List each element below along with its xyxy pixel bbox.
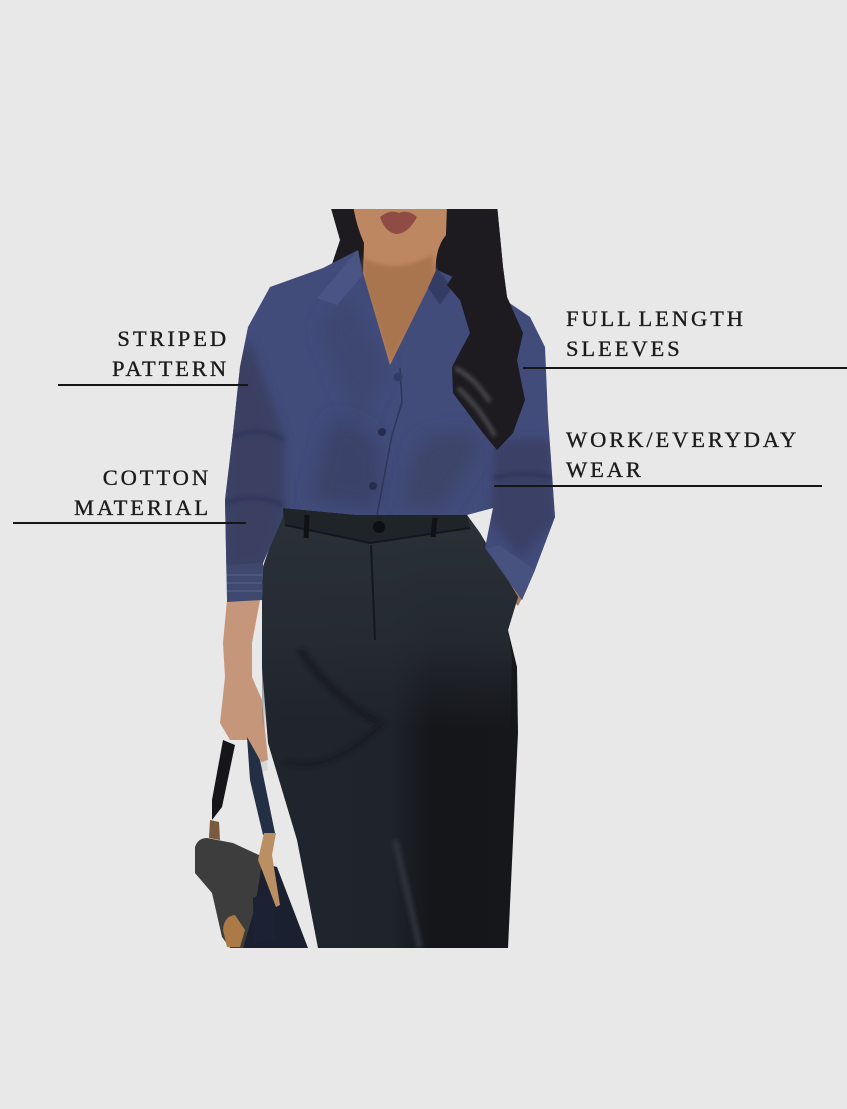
label: striped pattern: PATTERN <box>112 356 229 381</box>
left forearm and hand <box>220 600 268 772</box>
hair <box>331 209 510 304</box>
cuffs <box>227 563 263 602</box>
label: cotton material <box>74 465 211 520</box>
model photo illustration <box>195 209 555 948</box>
leader line: work/everyday wear <box>494 485 822 487</box>
label: full length sleeves <box>566 306 746 361</box>
label: cotton material: COTTON <box>103 465 211 490</box>
label: full length sleeves: SLEEVES <box>566 336 683 361</box>
handbag <box>195 737 308 948</box>
leader line: cotton material <box>13 522 246 524</box>
hair over shirt <box>447 205 525 450</box>
label: work/everyday wear <box>566 427 799 482</box>
label: full length sleeves: FULL LENGTH <box>566 306 746 331</box>
buttons <box>394 372 402 382</box>
leader line: striped pattern <box>58 384 248 386</box>
shirt <box>222 205 555 602</box>
hand in pocket <box>508 580 522 606</box>
label: work/everyday wear: WEAR <box>566 457 644 482</box>
label: striped pattern: STRIPED <box>117 326 229 351</box>
trousers <box>262 508 518 948</box>
leader line: full length sleeves <box>523 367 847 369</box>
placket <box>377 368 402 515</box>
label: striped pattern <box>112 326 229 381</box>
collar <box>317 250 362 305</box>
face and neck <box>353 205 447 365</box>
label: work/everyday wear: WORK/EVERYDAY <box>566 427 799 452</box>
waistband <box>283 508 470 543</box>
label: cotton material: MATERIAL <box>74 495 211 520</box>
